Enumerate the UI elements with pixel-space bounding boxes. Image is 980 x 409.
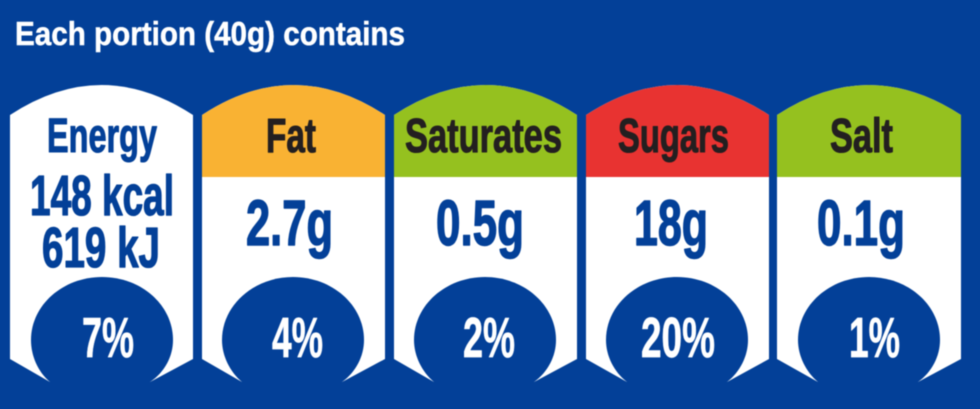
heading: Saturates: Saturates: [405, 110, 562, 163]
value: 2.7g: 2.7g: [246, 187, 333, 259]
percent: 2%: 2%: [463, 306, 515, 370]
card body: [10, 85, 193, 382]
card body: [202, 85, 385, 382]
card body: [394, 85, 577, 382]
percent blob: [606, 277, 748, 382]
heading: Sugars: Sugars: [618, 110, 729, 163]
heading: Fat: Fat: [266, 110, 316, 163]
percent: 1%: 1%: [849, 306, 900, 370]
header band: green: [777, 85, 961, 177]
percent: 7%: 7%: [82, 306, 134, 370]
heading: Energy: Energy: [47, 110, 157, 163]
percent blob: [222, 277, 364, 382]
header band: red: [586, 85, 769, 177]
header band: green: [394, 85, 577, 177]
percent blob: [414, 277, 556, 382]
value: 0.5g: 0.5g: [436, 187, 524, 259]
header band: amber: [202, 85, 385, 177]
heading: Salt: Salt: [830, 110, 893, 163]
card body: [586, 85, 769, 382]
percent blob: [798, 277, 940, 382]
value: 18g: 18g: [634, 187, 708, 259]
percent: 4%: 4%: [272, 306, 323, 370]
percent blob: [31, 277, 173, 382]
title: Each portion (40g) contains: [15, 15, 405, 52]
percent: 20%: 20%: [641, 306, 715, 370]
value: kJ: 619 kJ: [42, 216, 160, 280]
value: 0.1g: 0.1g: [817, 187, 905, 259]
panel: fat: [202, 85, 385, 382]
panel: sugars: [586, 85, 769, 382]
panel: saturates: [394, 85, 577, 382]
panel: energy: [10, 85, 193, 382]
value: kcal: 148 kcal: [30, 164, 174, 228]
panel: salt: [777, 85, 961, 382]
card body: [777, 85, 961, 382]
